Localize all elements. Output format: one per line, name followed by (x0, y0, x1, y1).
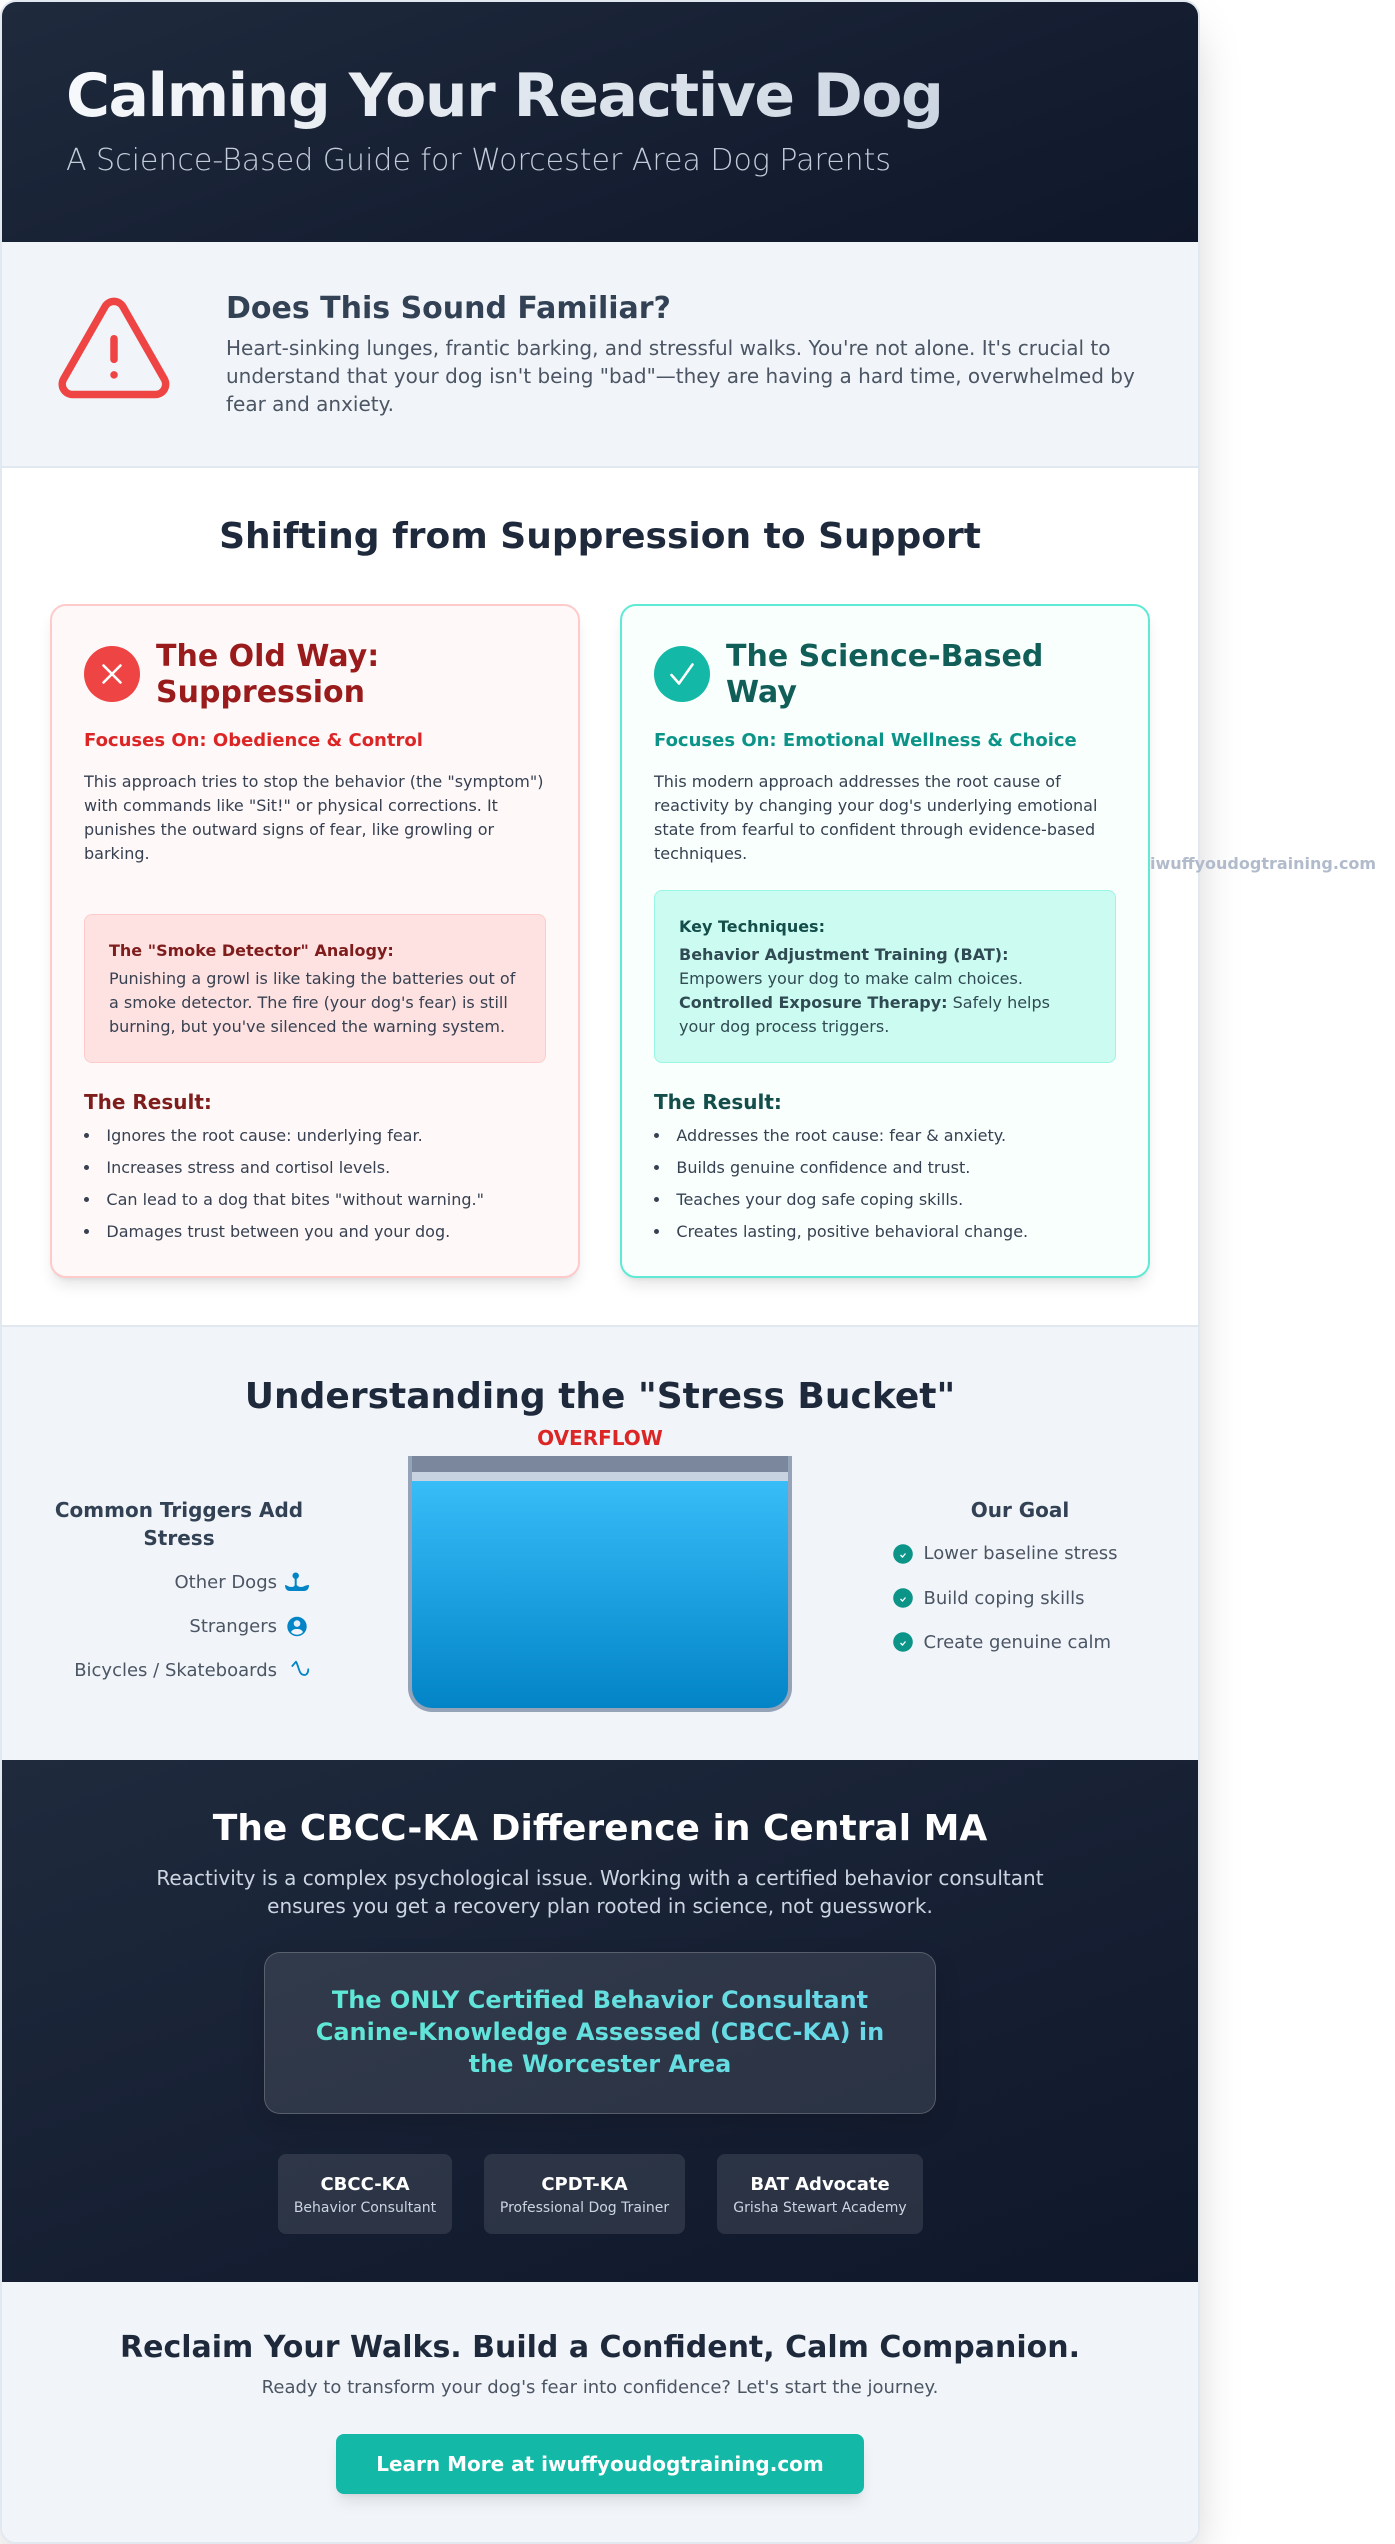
button: Learn More at iwuffyoudogtraining.com (376, 2452, 824, 2476)
callout title: Key Techniques: (679, 917, 825, 936)
text block (226, 336, 1135, 416)
text block: Ready to transform your dog's fear into confidence? Let's start the journey. (262, 2377, 938, 2398)
result list: Addresses the root cause: fear & anxiety. (676, 1126, 1006, 1145)
heading: The Science-Based (726, 638, 1043, 674)
text block: fear and anxiety. (226, 392, 394, 416)
heading (156, 638, 379, 710)
badge: BAT Advocate (717, 2154, 923, 2234)
panel: old way (50, 604, 580, 1278)
trigger: strangers: Strangers (189, 1616, 277, 1637)
result heading: The Result: (654, 1090, 782, 1114)
goal heading: Our Goal (971, 1498, 1069, 1522)
callout text: a smoke detector. The fire (your dog's fear) is still (109, 993, 508, 1012)
result list: Creates lasting, positive behavioral change. (676, 1222, 1028, 1241)
panel: science-based way (620, 604, 1150, 1278)
trigger: bicycles and skateboards: Bicycles / Skateboards (74, 1660, 277, 1681)
result list (654, 1126, 1028, 1241)
panel: does this sound familiar (2, 242, 1198, 468)
button (336, 2434, 864, 2494)
result list: Builds genuine confidence and trust. (676, 1158, 970, 1177)
heading: Reclaim Your Walks. Build a Confident, Calm Companion. (120, 2330, 1080, 2365)
callout: key techniques (654, 890, 1116, 1063)
heading: Shifting from Suppression to Support (219, 516, 981, 557)
goal item: lower baseline stress: Lower baseline stress (924, 1543, 1118, 1564)
badge: BAT Advocate: BAT Advocate (750, 2174, 890, 2195)
goal item: build coping skills: Build coping skills (924, 1588, 1084, 1609)
heading: The CBCC-KA Difference in Central MA (213, 1808, 987, 1848)
result list: Ignores the root cause: underlying fear. (106, 1126, 423, 1145)
overflow label: OVERFLOW (537, 1426, 663, 1450)
heading: Understanding the "Stress Bucket" (245, 1376, 955, 1416)
panel: comparison (2, 468, 1198, 1327)
bucket illustration (408, 1456, 792, 1712)
heading (726, 638, 1043, 710)
callout text: your dog process triggers. (679, 1016, 889, 1036)
triggers heading (55, 1498, 303, 1550)
callout: smoke detector analogy (84, 914, 546, 1063)
panel: CBCC-KA difference (2, 1760, 1198, 2282)
callout title: The "Smoke Detector" Analogy: (109, 941, 394, 960)
badge: CBCC-KA (278, 2154, 452, 2234)
badge: CBCC-KA: CBCC-KA (320, 2174, 410, 2195)
focus line: Focuses On: Emotional Wellness & Choice (654, 730, 1077, 751)
triggers heading: Common Triggers Add (55, 1498, 303, 1522)
description: This modern approach addresses the root cause of (654, 772, 1061, 790)
credential callout (264, 1952, 936, 2114)
callout text (109, 969, 516, 1036)
result list: Teaches your dog safe coping skills. (676, 1190, 963, 1209)
result list: Can lead to a dog that bites "without warning." (106, 1190, 484, 1209)
callout text: burning, but you've silenced the warning system. (109, 1017, 505, 1036)
result list (84, 1126, 484, 1241)
panel: stress bucket (2, 1327, 1198, 1760)
description: barking. (84, 844, 150, 862)
heading: Does This Sound Familiar? (226, 291, 671, 326)
description: This approach tries to stop the behavior (the "symptom") (84, 772, 544, 790)
description: state from fearful to confident through evidence-based (654, 820, 1095, 838)
watermark: iwuffyoudogtraining.com (1150, 854, 1376, 873)
triggers heading: Stress (143, 1526, 215, 1550)
goal item: create genuine calm: Create genuine calm (924, 1632, 1111, 1652)
description: punishes the outward signs of fear, like growling or (84, 820, 494, 838)
badge: CPDT-KA (484, 2154, 685, 2234)
callout text (265, 1984, 935, 2080)
text block: Heart-sinking lunges, frantic barking, and stressful walks. You're not alone. It's crucial to (226, 336, 1110, 360)
heading: Suppression (156, 674, 365, 710)
callout text: Empowers your dog to make calm choices. (679, 968, 1023, 988)
text block: ensures you get a recovery plan rooted in science, not guesswork. (267, 1894, 933, 1918)
badge: CPDT-KA: CPDT-KA (541, 2174, 628, 2195)
focus line: Focuses On: Obedience & Control (84, 730, 423, 751)
text block (156, 1866, 1044, 1918)
icon: bicycles (291, 1660, 310, 1676)
description: with commands like "Sit!" or physical corrections. It (84, 796, 498, 814)
callout text: Punishing a growl is like taking the batteries out of (109, 969, 515, 988)
subtitle: A Science-Based Guide for Worcester Area Dog Parents (66, 142, 891, 178)
icon: cross (84, 646, 140, 702)
heading: Way (726, 674, 797, 710)
callout text: The ONLY Certified Behavior Consultant (332, 1986, 868, 2014)
callout text: the Worcester Area (469, 2050, 731, 2078)
icon: warning triangle (58, 298, 170, 398)
description: reactivity by changing your dog's underlying emotional (654, 796, 1097, 814)
badge: CPDT-KA: Professional Dog Trainer (500, 2200, 669, 2216)
text block: Reactivity is a complex psychological issue. Working with a certified behavior consultant (156, 1866, 1044, 1890)
panel: call to action (2, 2282, 1198, 2544)
result list: Increases stress and cortisol levels. (106, 1158, 390, 1177)
panel: header (2, 2, 1198, 242)
callout text: Controlled Exposure Therapy: Safely helps (679, 992, 1050, 1012)
description (654, 772, 1097, 862)
badge: CBCC-KA: Behavior Consultant (294, 2200, 436, 2216)
callout text: Behavior Adjustment Training (BAT): (679, 944, 1009, 964)
icon: other dogs (285, 1572, 309, 1591)
result list: Damages trust between you and your dog. (106, 1222, 450, 1241)
text block: understand that your dog isn't being "bad"—they are having a hard time, overwhelmed by (226, 364, 1135, 388)
trigger: other dogs: Other Dogs (174, 1572, 277, 1593)
badge: BAT Advocate: Grisha Stewart Academy (733, 2200, 907, 2216)
icon: check (654, 646, 710, 702)
description (84, 772, 544, 862)
result heading: The Result: (84, 1090, 212, 1114)
description: techniques. (654, 844, 747, 862)
callout text: Canine-Knowledge Assessed (CBCC-KA) in (316, 2018, 884, 2046)
callout text (679, 944, 1050, 1036)
heading: The Old Way: (156, 638, 379, 674)
title: Calming Your Reactive Dog (66, 61, 942, 131)
icon: strangers (287, 1616, 307, 1636)
